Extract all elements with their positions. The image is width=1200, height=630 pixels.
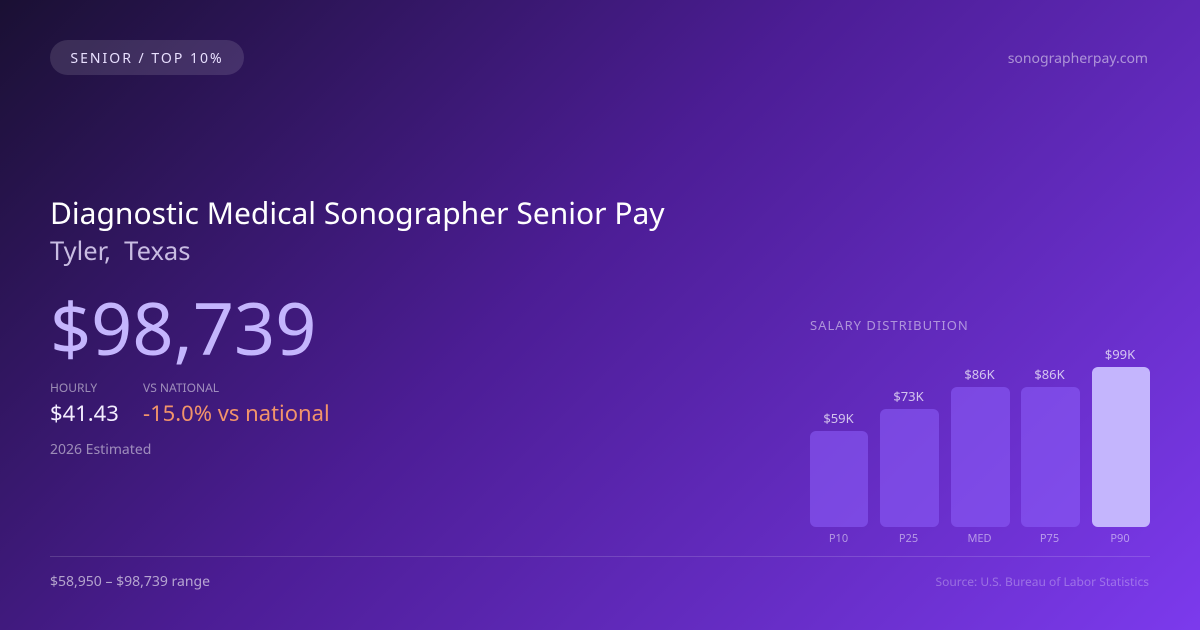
site domain: sonographerpay.com	[1008, 49, 1148, 68]
value P90: $99K	[1105, 345, 1135, 363]
badge: senior / top 10%: SENIOR / TOP 10%	[70, 49, 224, 68]
label P25: P25	[899, 531, 918, 546]
title: Diagnostic Medical Sonographer Senior Pay	[50, 192, 665, 233]
stat: vs national	[143, 379, 330, 428]
value P25: $73K	[893, 387, 924, 405]
value P10: $59K	[823, 409, 854, 427]
badge: senior / top 10%	[50, 40, 244, 75]
label P90: P90	[1110, 531, 1130, 546]
hourly label: HOURLY	[50, 379, 97, 396]
bar P25	[880, 409, 939, 527]
bar P10	[810, 431, 868, 527]
chart: salary distribution	[810, 316, 1150, 546]
value P75: $86K	[1034, 365, 1065, 383]
value median: $86K	[964, 365, 995, 383]
label P75: P75	[1040, 531, 1059, 546]
bar P75	[1021, 387, 1080, 527]
main salary figure: $98,739	[50, 279, 316, 377]
label median: MED	[967, 531, 992, 546]
chart heading: SALARY DISTRIBUTION	[810, 316, 969, 334]
source: Source: U.S. Bureau of Labor Statistics	[936, 573, 1149, 590]
label P10: P10	[829, 531, 848, 546]
vs national label: VS NATIONAL	[143, 379, 219, 396]
estimate note: 2026 Estimated	[50, 440, 151, 459]
salary range: $58,950 – $98,739 range	[50, 572, 210, 591]
stat: hourly	[50, 379, 119, 428]
vs national value: -15.0% vs national	[143, 398, 330, 428]
bar P90	[1092, 367, 1150, 527]
hourly value: $41.43	[50, 398, 119, 428]
subtitle: location: Tyler, Texas	[50, 234, 190, 268]
bar median	[951, 387, 1010, 527]
